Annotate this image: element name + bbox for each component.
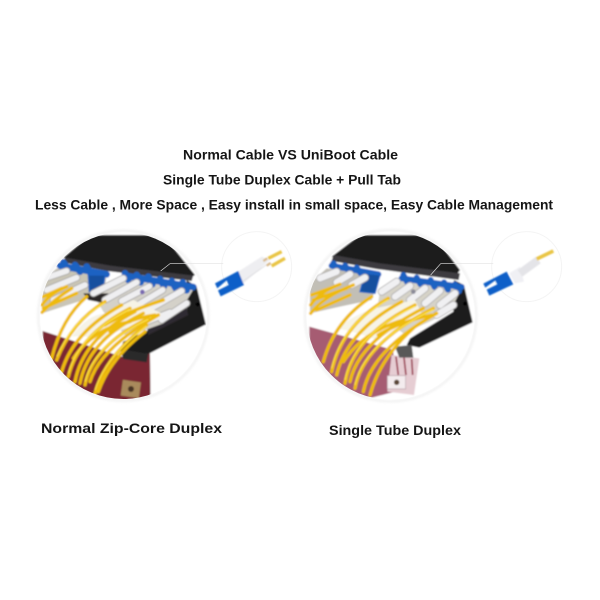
icon: LC uniboot connector, single tube bbox=[483, 251, 553, 296]
photo: patch panel with zip-core cables bbox=[40, 234, 206, 399]
subtitle: Single Tube Duplex Cable + Pull Tab: Single Tube Duplex Cable + Pull Tab bbox=[163, 172, 401, 188]
blue connectors right bbox=[332, 263, 462, 293]
white pale boots between cables bbox=[337, 300, 423, 340]
inset circle bbox=[492, 232, 562, 302]
white boots bbox=[47, 271, 187, 322]
label: Single Tube Duplex: Single Tube Duplex bbox=[329, 423, 462, 438]
magnifier circle border bbox=[305, 230, 476, 401]
yellow cables bbox=[311, 284, 437, 395]
blue connectors bbox=[60, 262, 193, 292]
photo: patch panel with uniboot cables bbox=[308, 234, 474, 398]
panel: normal zip-core duplex bbox=[37, 228, 292, 405]
title: Normal Cable VS UniBoot Cable: Normal Cable VS UniBoot Cable bbox=[183, 148, 398, 162]
callout leader bbox=[161, 264, 223, 271]
white boots bbox=[320, 272, 455, 315]
callout leader bbox=[431, 264, 493, 275]
icon: LC duplex connector, two tubes bbox=[215, 252, 285, 296]
text block: benefits: Less Cable , More Space , Easy install in small space, Easy Cable Management bbox=[35, 198, 554, 212]
white pale boots between cables bbox=[72, 300, 162, 340]
label: Normal Zip-Core Duplex: Normal Zip-Core Duplex bbox=[41, 421, 223, 436]
panel: single tube duplex bbox=[303, 228, 562, 405]
magnifier circle border bbox=[38, 231, 208, 401]
inset circle bbox=[222, 232, 292, 302]
yellow cables bbox=[42, 287, 163, 393]
